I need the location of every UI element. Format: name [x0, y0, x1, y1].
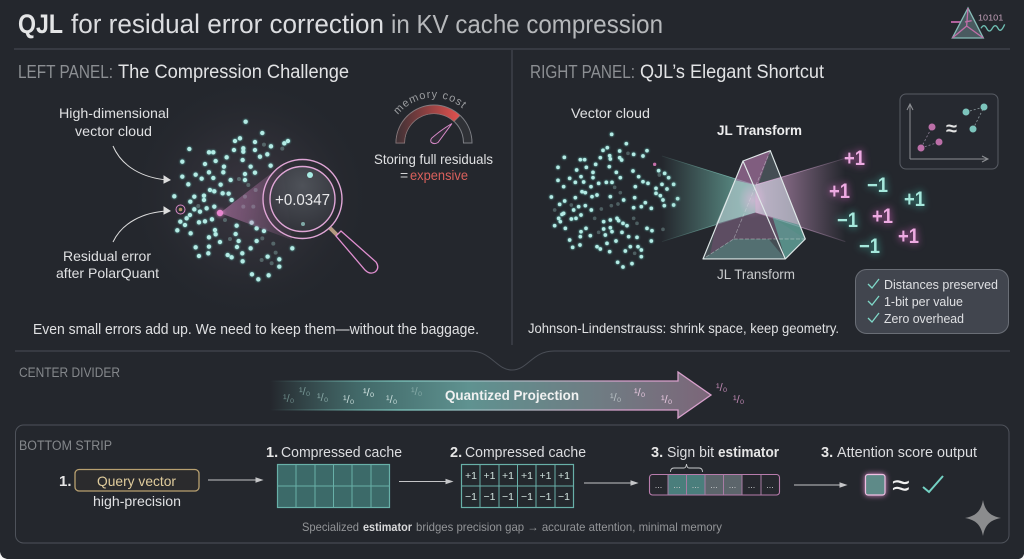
step: compressed cache 2: Compressed cache — [465, 445, 586, 461]
heading: left panel: LEFT PANEL: — [18, 62, 113, 82]
output bits: +1 — [872, 205, 893, 228]
arrow: estimator to output — [794, 483, 846, 487]
heading: left panel — [18, 62, 349, 83]
callout: benefits checklist: 1-bit per value — [884, 294, 963, 309]
icon: check mark — [923, 476, 943, 492]
icon: magnifying glass — [263, 160, 378, 273]
label: JL transform: JL Transform — [717, 266, 795, 282]
label: vector cloud: Vector cloud — [571, 105, 650, 121]
title: in KV cache compression — [391, 9, 663, 39]
heading: right panel — [530, 62, 825, 83]
step: compressed cache 2: −1 — [558, 491, 570, 503]
prism top face — [735, 151, 770, 185]
text: estimator note: bridges precision gap → accurate attention, minimal memory — [416, 520, 722, 534]
icon: sparkle star — [965, 500, 1001, 536]
inset: distance preservation plot: ≈ — [946, 118, 957, 140]
step: compressed cache 2: 2. — [450, 445, 462, 461]
step: attention score output: Attention score output — [837, 445, 977, 461]
label: JL transform heading: JL Transform — [717, 122, 802, 138]
step: compressed cache 2: −1 — [465, 491, 477, 503]
output bits: −1 — [859, 235, 880, 258]
magnified value: +0.0347 — [275, 192, 330, 209]
icon: residual marker — [176, 205, 185, 214]
label: center divider: CENTER DIVIDER — [19, 365, 120, 380]
falling bit labels: ¹/₀ — [386, 394, 397, 406]
text: estimator note: estimator — [363, 520, 412, 534]
arrow: quantized cache to estimator — [584, 481, 637, 485]
title: for residual error correction — [71, 9, 384, 39]
step: attention score output: ≈ — [892, 467, 910, 503]
step: compressed cache 2: +1 — [484, 470, 496, 482]
divider lines — [14, 49, 1010, 345]
step: compressed cache 2: +1 — [540, 470, 552, 482]
heading: right panel: RIGHT PANEL: — [530, 62, 635, 82]
step: query vector: Query vector — [97, 473, 176, 489]
falling bit labels: ¹/₀ — [733, 394, 744, 406]
step: query vector: 1. — [59, 473, 72, 490]
falling bit labels: ¹/₀ — [610, 392, 621, 404]
label: high-dimensional vector cloud: vector cloud — [75, 123, 152, 139]
step: compressed cache 1 — [266, 445, 402, 508]
prism lower teal faces — [703, 239, 785, 259]
step: attention score output — [821, 445, 977, 503]
step: compressed cache 2: +1 — [521, 470, 533, 482]
step: compressed cache 2: −1 — [484, 491, 496, 503]
panel: left — [18, 62, 493, 338]
falling bit labels: ¹/₀ — [299, 386, 310, 398]
step: sign bit estimator: ... — [692, 480, 699, 490]
step: query vector — [59, 470, 199, 509]
gauge: memory cost — [394, 92, 472, 144]
falling bit labels: ¹/₀ — [317, 392, 328, 404]
step: compressed cache 2: −1 — [521, 491, 533, 503]
step: sign bit estimator: estimator — [718, 445, 779, 461]
panel: right — [528, 62, 1008, 336]
output bits: −1 — [837, 209, 858, 232]
falling bit labels: ¹/₀ — [411, 386, 422, 398]
step: compressed cache 1: 1. — [266, 445, 278, 461]
text: right caption: Johnson-Lindenstrauss: shrink space, keep geometry. — [528, 320, 839, 336]
text: storing full residuals: Storing full residuals — [374, 151, 493, 167]
output bits: +1 — [898, 225, 919, 248]
falling bit labels: ¹/₀ — [343, 394, 354, 406]
diagram: JL transform beams and prism — [662, 151, 845, 259]
panel: bottom strip — [16, 425, 1009, 543]
label: high-dimensional vector cloud — [59, 105, 169, 139]
step: sign bit estimator: ... — [729, 480, 736, 490]
step: sign bit estimator: ... — [766, 480, 774, 490]
point: selected residual — [217, 210, 223, 216]
step: compressed cache 2: +1 — [558, 470, 570, 482]
label: residual error: after PolarQuant — [56, 265, 159, 281]
label: residual error: Residual error — [63, 248, 151, 264]
label: bottom strip: BOTTOM STRIP — [19, 438, 112, 453]
step: sign bit estimator: 3. — [651, 445, 663, 461]
step: compressed cache 2: −1 — [540, 491, 552, 503]
label: residual error — [56, 248, 159, 281]
step: compressed cache 2: +1 — [465, 470, 477, 482]
text: storing full residuals: expensive — [410, 167, 468, 183]
falling bit labels: ¹/₀ — [716, 382, 727, 394]
prism edges — [703, 151, 805, 259]
falling bit labels — [283, 382, 744, 406]
step: compressed cache 2 — [450, 445, 586, 508]
falling bit labels: ¹/₀ — [363, 387, 374, 399]
falling bit labels: ¹/₀ — [634, 387, 645, 399]
arrow: cache to quantized cache — [399, 480, 452, 484]
inset: distance preservation plot — [900, 94, 998, 169]
gauge label: memory cost — [394, 92, 466, 114]
prism central highlight — [739, 182, 767, 218]
title — [18, 9, 663, 39]
arrow: query to cache — [208, 478, 262, 482]
step: sign bit estimator: ... — [655, 480, 662, 490]
step: attention score output: 3. — [821, 445, 833, 461]
step: query vector: high-precision — [93, 493, 181, 509]
text: estimator note: Specialized — [302, 520, 359, 534]
icon: prism logo — [951, 8, 1005, 38]
title: QJL — [18, 9, 63, 39]
output bits: +1 — [904, 188, 925, 211]
output bits: +1 — [844, 147, 865, 170]
text: left caption: Even small errors add up. We need to keep them—without the baggage. — [33, 322, 479, 338]
step: compressed cache 2: +1 — [502, 470, 514, 482]
magnifier cone — [220, 165, 292, 240]
teal beam — [662, 156, 755, 242]
callout: benefits checklist — [856, 270, 1008, 334]
cloud glow — [125, 73, 375, 323]
step: compressed cache 2: −1 — [502, 491, 514, 503]
callout: benefits checklist: Zero overhead — [884, 311, 964, 326]
prism lower purple face — [710, 212, 805, 254]
callout: benefits checklist: Distances preserved — [884, 277, 998, 292]
step: sign bit estimator: ... — [673, 480, 681, 490]
label: high-dimensional vector cloud: High-dimensional — [59, 105, 169, 121]
arrow: to residual error — [113, 207, 170, 242]
icon: prism logo: 10101 — [978, 14, 1004, 23]
step: compressed cache 1: Compressed cache — [281, 445, 402, 461]
pink beam — [755, 158, 845, 242]
chart: left vector cloud dots — [172, 119, 294, 281]
chart: right vector cloud dots — [549, 132, 679, 269]
step: sign bit estimator: Sign bit — [667, 445, 714, 461]
output bits: +1 — [829, 180, 850, 203]
text: storing full residuals: = — [400, 167, 408, 183]
step: sign bit estimator: ... — [748, 480, 755, 490]
falling bit labels: ¹/₀ — [283, 393, 294, 405]
text: storing full residuals — [374, 151, 493, 183]
arrow: to vector cloud — [113, 146, 170, 183]
step: sign bit estimator: ... — [710, 480, 718, 490]
arrow: quantized projection — [270, 372, 744, 418]
page corners — [0, 552, 1024, 559]
output bits: −1 — [867, 174, 888, 197]
output bits — [829, 147, 925, 258]
arrow: quantized projection: Quantized Projection — [445, 387, 579, 403]
falling bit labels: ¹/₀ — [661, 394, 672, 406]
heading: right panel: QJL’s Elegant Shortcut — [640, 62, 825, 83]
prism light band — [716, 178, 799, 225]
prism base fill — [703, 151, 805, 259]
heading: left panel: The Compression Challenge — [118, 62, 349, 83]
step: sign bit estimator — [650, 445, 780, 495]
